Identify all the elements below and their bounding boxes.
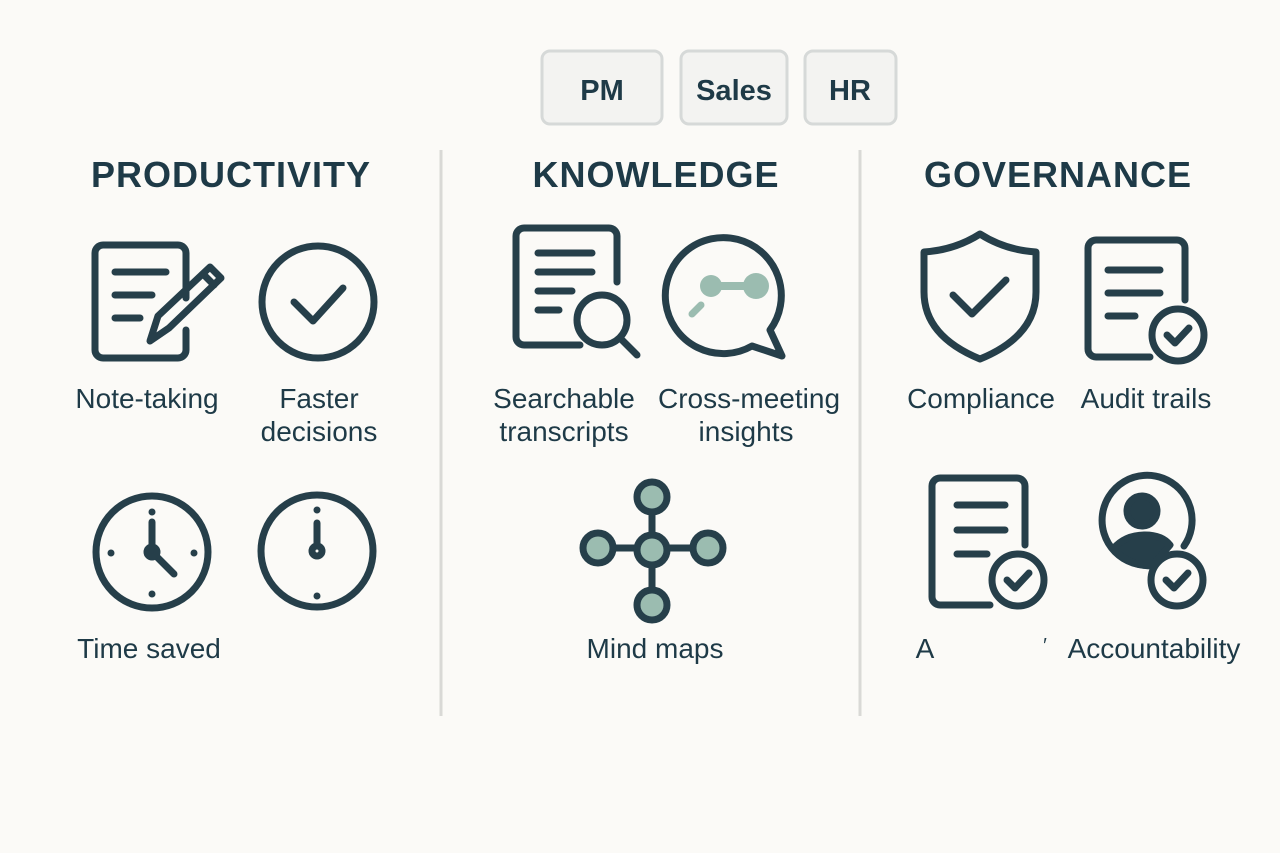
label: note-taking: Note-taking bbox=[75, 383, 219, 414]
label: mind maps: Mind maps bbox=[587, 633, 723, 664]
label: cross-meeting insights: Cross-meeting bbox=[658, 383, 840, 414]
icon: speech bubble insights bbox=[665, 238, 782, 356]
tab: PM bbox=[542, 51, 662, 124]
icon: audit trails bbox=[1088, 240, 1204, 361]
heading: knowledge: KNOWLEDGE bbox=[532, 154, 780, 195]
label: A: A bbox=[916, 633, 935, 664]
icon: document check bbox=[932, 478, 1044, 606]
label: time saved: Time saved bbox=[77, 633, 221, 664]
labels bbox=[75, 383, 1240, 664]
tab: Sales: Sales bbox=[696, 75, 772, 107]
tab: PM: PM bbox=[580, 75, 624, 107]
tabs bbox=[542, 51, 896, 124]
icon: searchable transcripts bbox=[516, 228, 637, 355]
icon: mind map bbox=[583, 482, 723, 620]
icon: clock bbox=[96, 496, 208, 608]
label: faster decisions: decisions bbox=[261, 416, 377, 447]
icon: faster decisions bbox=[262, 246, 374, 358]
label: faster decisions: Faster bbox=[279, 383, 359, 414]
tab: HR bbox=[805, 51, 896, 124]
label: searchable transcripts: Searchable bbox=[493, 383, 635, 414]
icon: clock 2 bbox=[261, 495, 373, 607]
tab: Sales bbox=[681, 51, 787, 124]
headings bbox=[91, 154, 1192, 195]
label: searchable transcripts: transcripts bbox=[499, 416, 629, 447]
label: audit trails: Audit trails bbox=[1081, 383, 1211, 414]
icon: accountability person bbox=[1102, 475, 1203, 606]
label: compliance: Compliance bbox=[907, 383, 1055, 414]
heading: productivity: PRODUCTIVITY bbox=[91, 154, 371, 195]
icon: note-taking bbox=[95, 245, 221, 358]
heading: governance: GOVERNANCE bbox=[924, 154, 1192, 195]
label: cross-meeting insights: insights bbox=[699, 416, 793, 447]
tab: HR: HR bbox=[829, 75, 871, 107]
label: tick mark: ′ bbox=[1043, 635, 1047, 657]
label: accountability: Accountability bbox=[1068, 633, 1240, 664]
icon: shield bbox=[924, 234, 1036, 359]
